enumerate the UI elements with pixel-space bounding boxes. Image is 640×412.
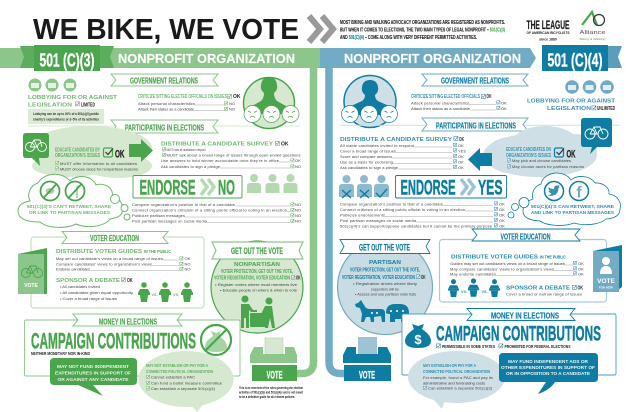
panel: blue get out the vote: • Access and use partisan voter lists [355,292,416,296]
green candidate survey: Ask candidates to sign a pledge [161,164,221,169]
arrow [468,148,492,171]
panel: green get out the vote: NONPARTISAN [234,262,280,268]
callout: connected organization: For example, found a PAC and pay its [423,375,493,380]
icon: green cloud with education text: MUST offer information to all candidates [60,161,137,166]
panel: blue voter education: Cover a broad or narrow range of issues [506,292,582,296]
panel: green voter education: OK [184,256,191,261]
panel: green get out the vote: GET OUT THE VOTE [231,246,283,256]
green candidate survey: MUST invite all candidates to respond [166,147,206,152]
panel: blue get out the vote: GET OUT THE VOTE [359,242,410,252]
disclaimer note [239,386,304,399]
green candidate survey: MUST ask about a broad range of issues through open-ended questions [166,152,300,158]
green endorse rules: Connect organization's criticism of a sitting public official to voting in an election [132,208,287,212]
icon: blue cloud with education text: May choose races for partisan reasons [512,164,584,169]
blue candidate survey: DISTRIBUTE A CANDIDATE SURVEY [340,137,452,143]
panel: blue get out the vote: supporters will be [371,286,400,292]
panel: green voter education: IN THE PUBLIC [144,249,172,254]
panel: green voter education [18,232,204,308]
panel: blue voter education [440,229,622,302]
panel: blue money in elections: PERMISSIBLE IN SOME STATES [442,344,496,350]
panel: blue voter education: OK [578,261,584,266]
icon: green cloud with education text [23,126,153,178]
panel: green get out the vote [211,241,303,333]
panel: green get out the vote: • Register voters where most members live [215,282,298,287]
green header band: 501 (C)(3) [40,50,94,70]
blue endorse rules: OK [499,212,505,218]
icon: blue cloud with education text [468,118,612,177]
blue divider and participating heading: PARTICIPATING IN ELECTIONS [436,122,516,130]
icon: three people with marks [339,175,389,198]
panel: green voter education: NO [184,266,190,272]
green endorse rules: Compare organization's position to that of a candidate [132,202,236,207]
lobbying heading [28,95,118,108]
panel: blue money in elections [402,308,616,409]
panel: blue money in elections: MONEY IN ELECTIONS [491,312,560,320]
icon: debate podiums: VS. [152,293,158,297]
green government relations heading [111,74,218,86]
callout: connected organization: CONNECTED POLITICAL ORGANIZATION [423,369,490,375]
panel: green voter education: Endorse candidates [56,266,90,272]
disclaimer note: to be a definitive guide for all relevant policies. [239,395,295,399]
callout: independent expenditures [50,358,137,396]
thought cloud: 501(c)(3) social media: 501(C)(3)'S CAN'T RETWEET, SHARE [27,204,111,209]
green side rail [290,68,314,374]
blue candidate survey: OK [458,143,464,148]
green endorse rules [132,202,301,224]
panel: green get out the vote: • Educate people on where & when to vote [220,288,298,292]
panel: green get out the vote: VOTER PROTECTION, GET OUT THE VOTE, [221,269,293,275]
icon: briefcases [565,80,614,94]
icon: green ballot box [250,338,297,382]
blue side rail [329,68,350,374]
icon: people voting [241,296,275,328]
panel: 501(c)(3) lobbying: LIMITED [81,102,95,108]
panel: blue voter education: VOTER EDUCATION [500,232,551,242]
green endorse rules: Post partisan messages on social media [132,218,208,224]
callout: connected organization: CONNECTED POLITICAL ORGANIZATION [146,369,213,375]
lobbying heading: LEGISLATION [28,102,72,108]
icon: debate podiums: VS. [173,293,179,297]
icon: no twitter [40,182,60,200]
panel: green voter education: DISTRIBUTE VOTER GUIDES [56,249,142,255]
green government relations text: Attack personal characteristics [138,101,195,106]
blue government relations text: OK [501,106,507,111]
green candidate survey: NO [295,164,301,169]
green endorse rules: NO [295,208,301,212]
panel: blue get out the vote: • Registration drives where likely [353,281,417,286]
panel: blue voter education: DISTRIBUTE VOTER GUIDES [451,254,538,260]
icon: debate podiums [448,278,500,297]
panel: blue voter education: Guides may set out candidate's views on a broad range of issues [450,261,565,266]
blue endorse rules: Post partisan messages on social media [340,218,417,223]
icon: green cloud with education text: ORGANIZATION'S ISSUES [55,153,100,159]
panel: green money in elections [24,314,240,412]
green divider and participating heading: PARTICIPATING IN ELECTIONS [125,124,204,132]
intro text: MOST BIKING AND WALKING ADVOCACY ORGANIZATIONS ARE REGISTERED AS NONPROFITS. [340,20,505,26]
panel: 501(c)(3) lobbying [28,78,118,124]
icon: three people [247,174,298,193]
icon: green cloud with education text: EDUCATE CANDIDATES BY [55,148,100,154]
thought cloud: 501(c)(3) social media [18,174,130,227]
green government relations text: NO [229,106,235,112]
logo: League of American Bicyclists: since 1880 [539,38,557,42]
blue candidate survey: OK [458,154,464,159]
icon: vote for her booklet: FOR HER! [599,286,613,290]
icon: grey chevrons [309,16,333,42]
green endorse rules: NO [295,213,301,218]
blue endorse rules: OK [499,202,505,206]
blue government relations text: Attack personal characteristics [411,100,469,106]
logo: League of American Bicyclists: OF AMERICAN BICYCLISTS [526,31,570,35]
callout: independent expenditures: MAY NOT FUND INDEPENDENT [57,364,129,369]
icon: bike speech tile [581,118,612,154]
callout: independent expenditures: OR AGAINST ANY CANDIDATE [58,377,128,382]
endorse yes box: ENDORSE [400,176,456,200]
panel: blue voter education: SPONSOR A DEBATE [506,286,570,292]
green endorse rules: NO [295,202,301,207]
panel: blue voter education: OK [578,266,584,272]
panel: blue voter education: May endorse candidates [450,272,496,276]
panel: green get out the vote: VOTER REGISTRATION, VOTER EDUCATION [214,276,290,282]
endorse no box: NO [218,176,235,200]
icon: debate podiums: VS. [461,290,467,294]
blue endorse rules: Connect criticism of a sitting public official to voting in an election [340,207,465,212]
blue endorse rules [340,202,505,228]
blue endorse rules: OK [499,218,505,223]
icon: green cloud with education text: OK [115,148,125,160]
green candidate survey: OK [295,158,301,163]
blue candidate survey: YES [458,148,466,154]
panel: green voter education: VOTER EDUCATION [90,234,139,243]
logo: Alliance for Biking and Walking: Biking & Walking [580,37,606,41]
green government relations text: OK [233,94,241,100]
callout: connected organization: Cannot establish a PAC [151,374,195,380]
thought cloud: 501(c)(4) social media: AND LINK TO PARTISAN MESSAGES [531,210,614,215]
green candidate survey [161,141,301,169]
endorse no box: ENDORSE [140,176,196,200]
icon: vote for her booklet: VOTE [597,278,616,285]
panel: green money in elections: MONEY IN ELECTIONS [99,318,157,326]
blue government relations heading: GOVERNMENT RELATIONS [441,76,509,86]
lobbying note: charity's expenditures or 3–5% of its activities [33,118,99,122]
icon: money bag: $ [414,332,422,347]
green endorse rules: NO [295,218,301,224]
icon: blue cloud with education text: May pick and choose candidates [512,158,571,163]
blue government relations text: Attack their status as a candidate [411,106,471,111]
endorse yes box: YES [478,176,502,200]
green endorse rules: Publicize partisan messages [132,213,185,218]
panel: green voter education: May set out candidate's views on a broad range of issues [56,256,163,261]
icon: man with frowning faces [342,76,398,128]
blue government relations text: OK [501,100,507,106]
panel: blue money in elections: PROHIBITED FOR FEDERAL ELECTIONS [504,344,571,350]
callout: independent expenditures: EXPENDITURES IN SUPPORT OF [55,370,131,376]
lobbying heading: LOBBYING FOR OR AGAINST [28,95,118,101]
intro text: BUT WHEN IT COMES TO ELECTIONS, THE TWO MAIN TYPES OF LEGAL NONPROFIT – 501(C)(3) [340,28,505,34]
panel: blue get out the vote [338,240,432,334]
icon: briefcases [28,78,76,92]
panel: green voter education: • All candidates given equal opportunity [60,290,133,295]
green candidate survey: Use answers to hold winner accountable once they're in office [161,158,280,163]
panel: green voter education: • All candidates invited [60,284,100,289]
icon: debate podiums [138,282,193,302]
green government relations text [138,94,241,112]
callout: independent ads: MAY FUND INDEPENDENT ADS OR [508,359,589,364]
callout: independent ads: OTHER EXPENDITURES IN SUPPORT OF [501,365,595,370]
panel: blue get out the vote: VOTER PROTECTION, GET OUT THE VOTE, [350,268,420,274]
icon: green ballot box: VOTE [266,370,282,382]
callout: connected organization: Can establish a separate 501(c)(4) [151,386,216,391]
callout: independent ads: OR IN OPPOSITION TO A CANDIDATE [506,371,590,376]
disclaimer note: This is an overview of the rules governing the election [239,386,303,390]
panel: green voter education: SPONSOR A DEBATE [56,278,120,284]
panel: blue voter education: OK [578,286,583,292]
icon: twitter [544,182,564,200]
blue candidate survey [340,136,466,170]
blue candidate survey: OK [459,137,464,143]
logo: League of American Bicyclists [526,20,570,42]
callout: connected organization: administrative and fundraising costs [423,380,485,386]
panel: green voter education: OK [127,278,133,284]
panel: green money in elections: CAMPAIGN CONTRIBUTIONS [31,328,196,354]
green candidate survey: DISTRIBUTE A CANDIDATE SURVEY [161,142,273,148]
callout: connected organization: MAY NOT ESTABLISH OR PAY FOR A [146,363,208,369]
thought cloud: 501(c)(3) social media: OR LINK TO PARTISAN MESSAGES [29,210,110,215]
icon: green cloud with education text: MUST choose races for nonpartisan reasons [60,166,138,172]
thought cloud: 501(c)(4) social media: 501(C)(4)'S CAN RETWEET, SHARE [531,204,614,209]
panel: green money in elections: NEITHER MONETARY NOR IN-KIND [31,351,90,357]
callout: connected organization: Can establish a separate 501(c)(3) [428,386,493,390]
icon: blue cloud with education text: ORGANIZATION'S ISSUES [506,153,551,159]
blue candidate survey: Score and compare answers [340,154,392,159]
panel: blue voter education: May compare candidates' views to organization's views [450,266,554,272]
icon: blue ballot box: VOTE [359,370,375,382]
green divider and participating heading [28,120,300,133]
blue endorse rules: Publicize endorsements [340,212,385,218]
lobbying note: Lobbying can be up to 20% of a 501(c)(3) public [33,112,99,116]
blue header band: 501 (C)(4) [548,50,602,70]
thought cloud: 501(c)(4) social media [508,173,620,225]
panel: 501(c)(4) lobbying: UNLIMITED [597,106,615,112]
panel: blue voter education: OK [578,272,584,276]
icon: debate podiums: VS. [482,290,488,294]
icon: vote booklet: VOTE [24,283,38,289]
logo: Alliance for Biking and Walking [580,12,606,41]
icon: facebook: f [576,184,582,202]
icon: vote booklet [18,248,47,294]
blue header band [320,45,622,71]
panel: blue get out the vote: VOTER REGISTRATION, VOTER EDUCATION [342,275,415,281]
icon: bike speech tile [23,133,49,166]
blue divider and participating heading [340,118,620,131]
panel: green voter education: • Cover a broad range of issues [60,296,117,301]
callout: connected organization: Can fund a ballot measure committee [151,380,223,386]
blue endorse rules: Compare organization's position to that of a candidate [340,202,444,206]
lobbying note [28,109,104,124]
logo: Alliance for Biking and Walking: Alliance [580,30,606,36]
blue candidate survey: Ask candidates to sign a pledge [340,165,399,170]
icon: blue ballot box [343,337,391,382]
green header band [0,45,320,71]
intro text: AND 501(C)(4) – COME ALONG WITH VERY DIFFERENT PERMITTED ACTIVITIES. [340,35,477,41]
panel: blue voter education: IN THE PUBLIC [540,254,567,260]
blue candidate survey: Use as a basis for endorsing [340,160,393,164]
icon: donkey and elephant [355,300,414,322]
icon: blue cloud with education text: OK [566,148,576,160]
blue candidate survey: All viable candidates invited to respond [340,143,414,148]
icon: blue cloud with education text: EDUCATE CANDIDATES ON [506,147,551,153]
icon: no facebook [66,182,84,200]
title: WE BIKE, WE VOTE [33,14,299,46]
blue government relations text: CRITICIZE SITTING ELECTED OFFICIALS [411,94,480,100]
callout: connected organization [408,351,505,409]
panel: blue get out the vote: OK [421,275,426,281]
icon: no money bag [201,325,231,355]
callout: connected organization: MAY ESTABLISH OR PAY FOR A [423,363,476,369]
green header band: NONPROFIT ORGANIZATION [118,51,295,66]
arrow [129,139,153,162]
blue header band: NONPROFIT ORGANIZATION [344,51,521,66]
intro text [340,20,505,41]
blue candidate survey: OK [458,160,464,164]
panel: green get out the vote: OK [296,276,301,282]
panel: green voter education: Compare candidates' views to organization's views [56,262,152,266]
blue government relations text [411,94,507,111]
green government relations text: NO [229,101,235,106]
green candidate survey: OK [281,142,289,148]
blue government relations heading [422,74,528,86]
callout: independent ads [499,353,598,394]
blue endorse rules: OK [499,224,505,228]
logo: League of American Bicyclists: THE LEAGUE [526,20,570,32]
panel: 501(c)(4) lobbying: LOBBYING FOR OR AGAINST [527,98,616,104]
icon: woman with frowning faces [244,77,299,128]
blue candidate survey: OK [458,165,464,170]
callout: connected organization [138,351,234,412]
panel: 501(c)(4) lobbying [527,80,616,112]
green government relations text: Attack their status as a candidate [138,106,195,112]
panel: blue get out the vote: PARTISAN [369,260,401,266]
green government relations heading: GOVERNMENT RELATIONS [130,76,198,86]
panel: green voter education: NO [184,262,190,266]
blue endorse rules: 501(c)(4)'s can support/oppose candidates but it cannot be the primary purpose [340,224,493,228]
blue endorse rules: OK [499,207,505,212]
green government relations text: CRITICIZE SITTING ELECTED OFFICIALS ON ISSUES [138,94,227,100]
panel: 501(c)(4) lobbying: LEGISLATION [547,106,591,112]
icon: vote for her booklet [593,245,622,292]
disclaimer note: activities of 501(c)(3)s and 501(c)(4)s and is not meant [239,390,304,394]
icon: money bag [405,324,431,348]
blue candidate survey: Cover a broad range of issues [340,148,396,154]
blue government relations text: OK [486,94,492,100]
